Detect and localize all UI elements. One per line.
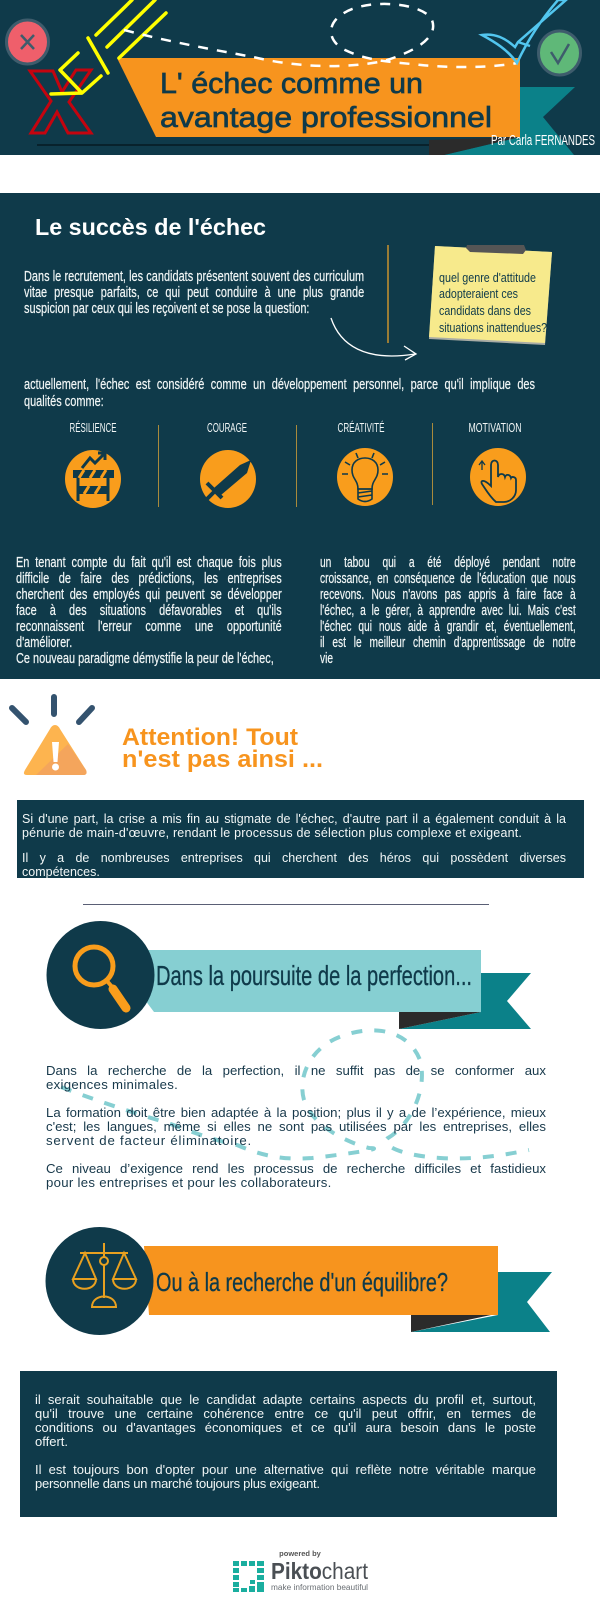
- icon: red cross button: [6, 20, 48, 64]
- dashed teal path: [61, 1030, 529, 1159]
- text: crisis paragraph: Il y a de nombreuses entreprises qui cherchent des héros qui possèdent diverses: [22, 851, 566, 865]
- text: crisis paragraph: Si d'une part, la crise a mis fin au stigmate de l'échec, d'autre part il a également conduit à la: [22, 812, 566, 826]
- heading: Le succès de l'échec: [35, 214, 266, 240]
- icon: red outlined X: [30, 70, 91, 133]
- icon: light bulb creativity: [337, 448, 393, 506]
- icon: warning triangle: [12, 697, 92, 775]
- text: conclusion: offert.: [35, 1434, 68, 1449]
- text: personal development paragraph: qualités comme:: [24, 393, 104, 410]
- arrow: [331, 318, 416, 360]
- quality labels: [70, 420, 522, 435]
- text: perfection body: servent de facteur éliminatoire.: [46, 1133, 252, 1148]
- text: perfection body: exigences minimales.: [46, 1077, 178, 1092]
- text: crisis paragraph: [22, 812, 566, 878]
- title: [160, 68, 492, 134]
- text: conclusion: personnelle dans un marché toujours plus exigeant.: [35, 1476, 320, 1491]
- icon: sword courage: [200, 450, 256, 508]
- quality labels: COURAGE: [207, 421, 247, 435]
- text: personal development paragraph: [24, 376, 535, 410]
- panel: header banner: [0, 0, 600, 155]
- text: crisis paragraph: pénurie de main-d'œuvre, rendant le processus de sélection plus complexe et exigeant.: [22, 826, 522, 840]
- wordmark: make information beautiful: [271, 1583, 368, 1592]
- text: right column: [320, 554, 576, 667]
- gold dividers: [158, 423, 432, 507]
- text: personal development paragraph: actuellement, l'échec est considéré comme un développement personnel, parce qu'il implique des: [24, 376, 535, 393]
- text: perfection body: Dans la recherche de la perfection, il ne suffit pas de se conformer aux: [46, 1063, 546, 1078]
- text: left column: difficile de faire des prédictions, les entreprises: [16, 570, 282, 587]
- panel: attention: [9, 694, 584, 878]
- ribbon tail: [37, 87, 575, 155]
- quality labels: CRÉATIVITÉ: [338, 420, 384, 435]
- panel: conclusion box: [20, 1371, 557, 1517]
- quality labels: MOTIVATION: [468, 421, 522, 435]
- panel: à la recherche d'un équilibre: [46, 1227, 552, 1335]
- text: conclusion: [35, 1392, 536, 1491]
- text: conclusion: Il est toujours bon d'opter pour une alternative qui reflète notre véritable marque: [35, 1462, 536, 1477]
- powered by: powered by: [279, 1549, 322, 1558]
- text: right column: recevons. Nous n'avons pas appris à faire face à: [320, 586, 576, 603]
- icon: blue sketched check: [482, 0, 566, 63]
- title: L' échec comme un: [160, 68, 423, 100]
- icon: logo mark: [233, 1561, 264, 1592]
- text: perfection body: La formation doit être bien adaptée à la position; plus il y a de l’expérience, mieux: [46, 1105, 546, 1120]
- ribbon: [144, 1246, 552, 1332]
- icon: yellow pencil: [51, 0, 166, 94]
- sticky note: situations inattendues?: [439, 321, 547, 335]
- panel: le succès de l'échec: [0, 193, 600, 679]
- text: perfection body: [46, 1063, 546, 1190]
- text: conclusion: qu'il trouve une certaine cohérence entre ce qu'il peut offrir, en termes de: [35, 1406, 536, 1421]
- text: left column: Ce nouveau paradigme démystifie la peur de l'échec,: [16, 650, 274, 667]
- sticky note: candidats dans des: [439, 304, 531, 318]
- icon: green check button: [538, 31, 580, 75]
- text: left column: [16, 554, 282, 667]
- text: conclusion: conditions ou d'avantages économiques et ce qu'il aura besoin dans le poste: [35, 1420, 536, 1435]
- heading: Ou à la recherche d'un équilibre?: [156, 1267, 448, 1297]
- ribbon: [145, 950, 531, 1029]
- icon: scales: [46, 1227, 154, 1335]
- text: conclusion: il serait souhaitable que le candidat adapte certains aspects du profil et, surtout,: [35, 1392, 536, 1407]
- text: left column: cherchent des employés qui peuvent se développer: [16, 586, 282, 603]
- dashed path with loop: [124, 4, 517, 67]
- text: right column: vie: [320, 650, 333, 667]
- gold divider: [387, 245, 389, 343]
- logo: piktochart: [233, 1549, 369, 1592]
- icon: barrier resilience: [65, 450, 121, 508]
- panel: dans la poursuite de la perfection: [46, 904, 546, 1190]
- orange title ribbon: [117, 58, 520, 137]
- text: left column: face à des situations défavorables et qu'ils: [16, 602, 282, 619]
- text: recruitment paragraph: vitae presque parfaits, ce qui peut conduire à une plus grande: [24, 284, 364, 301]
- text: right column: il est le meilleur chemin d'apprentissage de notre: [320, 634, 576, 651]
- quality labels: RÉSILIENCE: [70, 420, 116, 435]
- text: right column: l'échec qui nous aide à grandir et, éventuellement,: [320, 618, 576, 635]
- heading: n'est pas ainsi ...: [122, 746, 323, 773]
- sticky note: adopteraient ces: [439, 287, 518, 301]
- text: right column: un tabou qui a été déployé pendant notre: [320, 554, 576, 571]
- text: right column: l'échec, a le gérer, à apprendre avec lui. Mais c'est: [320, 602, 576, 619]
- text: recruitment paragraph: [24, 268, 364, 317]
- title: avantage professionnel: [160, 102, 492, 134]
- text: left column: d'améliorer.: [16, 634, 72, 651]
- text: perfection body: Ce niveau d’exigence rend les processus de recherche difficiles et fastidieux: [46, 1161, 546, 1176]
- text: recruitment paragraph: suspicion par ceux qui les reçoivent et se pose la question:: [24, 300, 309, 317]
- heading: [122, 724, 323, 773]
- text: perfection body: c'est; les langues, même si elles ne sont pas utilisées par les entreprises, elles: [46, 1119, 546, 1134]
- icon: magnifier: [46, 921, 154, 1029]
- heading: Attention! Tout: [122, 724, 298, 751]
- text: right column: croissance, en conséquence de l'éducation que nous: [320, 570, 576, 587]
- dark text box: [17, 800, 584, 878]
- sticky note: quel genre d'attitude: [439, 271, 536, 285]
- text: left column: reconnaissent l'erreur comme une opportunité: [16, 618, 282, 635]
- wordmark: Piktochart: [271, 1558, 369, 1584]
- text: left column: En tenant compte du fait qu'il est chaque fois plus: [16, 554, 282, 571]
- icon: pointing hand motivation: [470, 448, 526, 506]
- text: perfection body: pour les entreprises et pour les collaborateurs.: [46, 1175, 332, 1190]
- text: recruitment paragraph: Dans le recrutement, les candidats présentent souvent des curriculum: [24, 268, 364, 285]
- sticky note: [429, 245, 552, 345]
- heading: Dans la poursuite de la perfection...: [156, 960, 472, 991]
